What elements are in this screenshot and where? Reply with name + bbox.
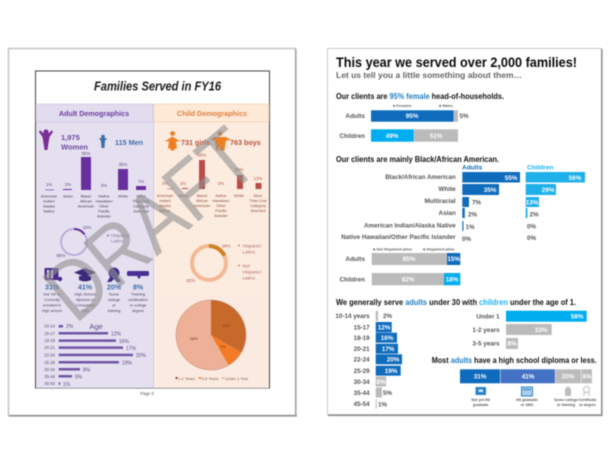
bars: adult race: 2% — [468, 212, 478, 218]
education icons and stats: 41% — [78, 284, 93, 292]
bars: child race: 2% — [530, 212, 539, 218]
bar chart: adult age: 18-19 — [44, 338, 56, 343]
bar chart: adult race: African — [80, 198, 92, 204]
gender legend: ■ Females — [393, 104, 412, 108]
education icons and stats: enrolled in — [43, 302, 61, 308]
title: This year we served over 2,000 families! — [336, 54, 577, 70]
section: race: Children — [527, 164, 553, 172]
education icons and stats: 8% — [133, 284, 144, 292]
icon: diploma — [127, 271, 149, 278]
bar: children gender: 49% — [386, 133, 399, 140]
bar chart: adult age: 19% — [122, 360, 133, 366]
bar chart: adult ages: 19% — [385, 368, 398, 375]
panel: left page — [8, 48, 297, 417]
bar chart: adult ages: 18-19 — [354, 335, 370, 342]
race row labels: American Indian/Alaska Native — [364, 222, 456, 229]
bar chart: adult ages: 1% — [378, 402, 388, 408]
donut chart: child ethnicity: Latino — [242, 276, 255, 280]
bar chart: child race: Native — [215, 193, 227, 198]
bar chart: adult age: 16% — [119, 339, 130, 345]
bars: child race — [526, 172, 585, 242]
bars: adult race: 7% — [472, 200, 482, 206]
boys count: 763 boys — [230, 138, 261, 147]
ethnicity legend: ■ Hispanic/Latino — [423, 248, 455, 252]
education icons and stats: GED — [81, 308, 89, 313]
bar chart: child race: Hawaiian/ — [212, 198, 230, 203]
bar: adults gender: 5% — [460, 113, 469, 120]
education labels: or training — [557, 403, 575, 407]
bar chart: adult race: Hawaiian/ — [95, 198, 113, 204]
bar chart: adult ages: 20% — [387, 356, 400, 364]
icon: not yet graduate — [44, 268, 62, 281]
donut chart: child ethnicity: Hispanic/ — [242, 270, 262, 274]
icon: boy — [210, 131, 231, 150]
education labels: Not yet HS — [471, 398, 491, 402]
bar chart: child race: Alaska — [159, 203, 172, 208]
icon: graduation cap — [74, 268, 96, 282]
icon: girl — [164, 131, 181, 150]
bar: children ethnicity: 18% — [446, 276, 459, 284]
panel: right page — [328, 48, 603, 416]
bar chart: adult race: Category — [133, 204, 149, 208]
bar chart: adult race: 2% — [65, 182, 71, 187]
bar chart: adult race: White — [118, 194, 128, 198]
pie chart: child age: 58% — [190, 337, 198, 341]
bar chart: child race: Other — [216, 203, 227, 208]
heading: race: Our clients are mainly Black/African American. — [336, 155, 499, 164]
bar chart: adult age: 45-54 — [44, 381, 56, 386]
bar chart: adult ages: 5% — [383, 390, 393, 397]
donut chart: adult ethnicity: 85% — [57, 253, 65, 258]
bar chart: adult age: Age — [89, 322, 103, 331]
bar: children gender: 51% — [430, 133, 443, 140]
bar: children ethnicity — [339, 273, 460, 285]
bar chart: child race: Selected — [250, 208, 266, 213]
education icons and stats: Not Yet or — [43, 292, 61, 296]
section: gender — [336, 92, 504, 142]
bar chart: adult race: 35% — [119, 162, 127, 167]
bar chart: child race: White — [234, 193, 244, 198]
bar chart: adult ages: 35-44 — [354, 390, 370, 397]
heading: gender: Our clients are 95% female head-of-households. — [336, 92, 504, 101]
pie chart: child age: 1-2 Years — [178, 376, 195, 381]
bar chart: child race: Pacific — [215, 208, 227, 213]
bar chart: adult race: Native — [43, 208, 55, 214]
pie chart: child age: Under 1 Year — [225, 376, 249, 381]
bar: adults ethnicity — [345, 253, 460, 265]
bar chart: child race: Native — [159, 208, 171, 213]
education icons and stats: Some — [109, 292, 119, 296]
bars: adult race: 1% — [466, 224, 475, 231]
bar chart: child ages: 58% — [571, 314, 584, 320]
bar chart: adult ages: 17% — [382, 346, 395, 353]
girls count: 731 girls — [181, 138, 210, 147]
bars: adult race: 0% — [462, 236, 472, 243]
education labels: Some college — [554, 398, 578, 402]
bars: child race: 29% — [542, 187, 555, 194]
pie chart: child age: 33% — [222, 324, 230, 328]
icon: not yet graduates — [476, 387, 486, 395]
bar chart: child race: African — [196, 198, 208, 203]
icon: certificate — [584, 386, 590, 396]
donut chart: child ethnicity: Hispanic/ — [242, 244, 262, 248]
bar: children gender: Children — [339, 133, 365, 140]
bars: adult race: 55% — [505, 175, 518, 182]
bar chart: child race: Indian/ — [159, 198, 172, 203]
donut chart: child ethnicity: Not — [242, 264, 250, 268]
page number: Page 3 — [140, 391, 154, 396]
icon: hs graduates — [522, 387, 532, 396]
icon: some college — [565, 386, 571, 396]
bar chart: adult age: 12% — [111, 332, 122, 338]
bar chart: child race: American — [194, 203, 210, 208]
bar chart: adult ages — [335, 311, 402, 409]
education icons and stats: certification — [128, 297, 148, 302]
bar chart: adult age: 5% — [75, 374, 83, 380]
bar chart: child race: 13% — [254, 176, 262, 181]
race row labels: White — [439, 186, 456, 193]
bar chart: adult ages: 22-24 — [354, 356, 370, 364]
bar chart: child race: 56% — [198, 152, 206, 158]
bar chart: child race: Islander — [214, 213, 229, 218]
education icons and stats: 20% — [107, 284, 122, 292]
bar: children gender — [339, 129, 458, 142]
bar chart: child race: 0% — [218, 181, 224, 186]
education labels: or GED — [521, 403, 534, 407]
bar chart: adult ages: 10-14 years — [335, 313, 370, 320]
education labels: or degree — [579, 403, 596, 407]
bar chart: adult race: Pacific — [98, 208, 110, 214]
bar: children ethnicity: 82% — [402, 276, 415, 284]
bar chart: child race: Than One — [249, 198, 267, 203]
education icons and stats: diploma or — [76, 297, 95, 302]
icon: man — [99, 135, 107, 148]
bar chart: adult race: American — [41, 194, 57, 198]
bar chart: child ages: 8% — [507, 340, 517, 348]
bar chart: adult race: More — [137, 194, 145, 198]
bar chart: adult race: Asian — [63, 194, 73, 198]
education icons and stats: or college — [130, 302, 146, 308]
bar chart: adult race: 0% — [101, 183, 107, 188]
bar chart: adult age: 20% — [136, 353, 147, 359]
donut chart: adult ethnicity: Hispanic/ — [111, 233, 130, 238]
pie chart: child age: 3-5 Years — [202, 376, 218, 381]
bar chart: adult ages: 25-29 — [354, 368, 370, 375]
bar chart: adult age: 22-24 — [44, 352, 56, 358]
bar chart: adult race — [41, 151, 150, 218]
race row labels: Asian — [439, 210, 456, 217]
race row labels: Native Hawaiian/Other Pacific Islander — [341, 234, 456, 241]
stacked bar: education: 8% — [582, 374, 592, 380]
section: age — [335, 298, 597, 409]
education labels: HS graduate — [516, 398, 538, 402]
bar chart: adult ages: 15-17 — [354, 324, 370, 332]
stacked bar: education — [460, 369, 592, 383]
bar: adults gender: 95% — [406, 113, 419, 120]
gender legend: ■ Males — [439, 104, 453, 108]
bar: adults ethnicity: Adults — [345, 256, 365, 263]
bar chart: adult race: Alaska — [43, 204, 56, 208]
bars: child race: 13% — [526, 200, 539, 206]
bar chart: adult ages: 2% — [383, 313, 393, 320]
bar chart: adult age: 15-17 — [44, 331, 56, 336]
bar chart: child race: Category — [250, 203, 266, 208]
donut chart: child ethnicity: 82% — [187, 278, 195, 283]
bar chart: child race: 2% — [180, 181, 186, 186]
education icons and stats: High School — [75, 292, 96, 296]
education labels: Certificate — [578, 398, 597, 402]
panel: adult demographics — [36, 104, 153, 388]
education icons and stats: training — [108, 308, 120, 313]
heading: education: Most adults have a high school diploma or less. — [432, 356, 597, 365]
education icons and stats: Completed — [76, 302, 94, 308]
bar: adults ethnicity: 85% — [403, 256, 416, 263]
bar chart: adult age: 10-14 — [44, 324, 56, 328]
bar chart: adult ages: 20-21 — [354, 346, 370, 353]
bars: child race: 0% — [527, 224, 537, 230]
title: families served: Families Served in FY16 — [94, 78, 222, 94]
pie chart: child age: 9% — [220, 345, 226, 349]
education icons and stats: or — [112, 302, 116, 308]
watermark: DRAFT: DRAFT — [26, 109, 274, 339]
bar chart: child race: Black/ — [197, 193, 208, 198]
bar chart: adult age: 20-21 — [44, 345, 56, 350]
bars: adult race — [462, 172, 520, 243]
stacked bar: education: 20% — [562, 374, 575, 380]
bar chart: adult age: 8% — [83, 368, 91, 374]
education icons and stats: college — [108, 297, 120, 302]
race row labels: Black/African American — [385, 174, 456, 181]
bar chart: adult age: 17% — [126, 346, 137, 352]
bar chart: adult race: Islander — [97, 214, 112, 218]
bar chart: child race — [157, 152, 267, 218]
bar chart: adult race: 1% — [46, 182, 52, 187]
pie chart: child age — [156, 295, 266, 387]
bar: adults gender: Adults — [345, 113, 365, 120]
bar chart: adult race: American — [78, 204, 94, 208]
donut chart: adult ethnicity: 15% — [83, 225, 91, 230]
education icons and stats: Currently — [44, 297, 60, 302]
donut chart: adult ethnicity: Latino — [111, 238, 124, 244]
bars: adult race: 35% — [484, 187, 497, 194]
bar chart: child race: American — [157, 193, 173, 198]
education icons and stats: degree — [132, 308, 144, 313]
section: race: Adults — [462, 164, 483, 172]
bar chart: adult race: Other — [99, 204, 110, 208]
bar chart: child race: Asian — [178, 193, 188, 198]
bar chart: child race: 29% — [235, 167, 243, 172]
bar chart: adult age: 30-34 — [44, 367, 56, 372]
men count: 115 Men — [115, 138, 143, 147]
bar chart: adult ages: 8% — [376, 379, 386, 386]
education icons and stats: high school — [42, 308, 62, 313]
bar chart: adult race: Indian/ — [43, 198, 56, 204]
bar chart: adult ages: 45-54 — [354, 401, 370, 408]
donut chart: adult ethnicity — [57, 225, 131, 258]
bar: adults ethnicity: 15% — [447, 256, 460, 263]
race row labels: Multiracial — [425, 198, 456, 205]
bar chart: adult race: Than One — [132, 198, 150, 204]
panel: child demographics — [153, 104, 269, 388]
bar chart: adult ages: 16% — [381, 335, 394, 342]
section: race — [336, 155, 585, 285]
stacked bar: education: 41% — [522, 374, 535, 380]
bar chart: child ages: Under 1 — [476, 314, 500, 320]
ethnicity legend: ■ Not Hispanic/Latino — [373, 248, 413, 252]
bar chart: child ages — [472, 311, 587, 349]
bar chart: adult age — [44, 322, 147, 388]
bar chart: adult age: 2% — [66, 324, 74, 330]
women count: Women — [61, 142, 88, 152]
education icons and stats: 31% — [45, 284, 60, 292]
bar chart: child race: 3% — [162, 181, 168, 186]
bar chart: adult race: Selected — [133, 208, 149, 214]
donut chart: child ethnicity — [187, 244, 262, 283]
bar chart: adult age: 1% — [63, 382, 71, 388]
education icons and stats — [42, 268, 149, 313]
bar chart: adult age: 35-44 — [44, 374, 56, 379]
icon: ribbon — [107, 268, 121, 282]
women count: 1,975 — [61, 133, 80, 142]
heading: child demographics: Child Demographics — [177, 109, 247, 118]
education labels: graduate — [473, 403, 488, 407]
icon: woman — [39, 129, 53, 150]
heading: age: We generally serve adults under 30 with children under the age of 1. — [336, 298, 576, 307]
donut chart: child ethnicity: 18% — [222, 244, 230, 248]
bar: children ethnicity: Children — [339, 276, 365, 284]
bar chart: adult race: Native — [98, 194, 110, 198]
heading: adult demographics: Adult Demographics — [59, 109, 129, 118]
bars: child race: 0% — [527, 235, 537, 242]
bar chart: adult ages: 12% — [378, 324, 391, 332]
subtitle: Let us tell you a little something about them… — [336, 70, 522, 80]
bar chart: child race: More — [254, 193, 262, 198]
bar: adults gender — [345, 110, 469, 122]
bar chart: adult age: 25-29 — [44, 360, 56, 365]
bar chart: adult race: 55% — [82, 151, 90, 156]
bar chart: child ages: 3-5 years — [472, 340, 500, 348]
bar chart: adult race: Black/ — [81, 194, 92, 198]
stacked bar: education: 31% — [474, 374, 487, 380]
bar chart: adult race: 7% — [138, 179, 144, 184]
bar chart: child ages: 1-2 years — [472, 327, 500, 334]
bar chart: child ages: 33% — [535, 327, 548, 334]
education icons and stats: Training — [131, 292, 145, 296]
bars: child race: 56% — [569, 175, 582, 182]
bar chart: adult ages: 30-34 — [354, 379, 370, 386]
donut chart: child ethnicity: Latino — [242, 250, 255, 254]
